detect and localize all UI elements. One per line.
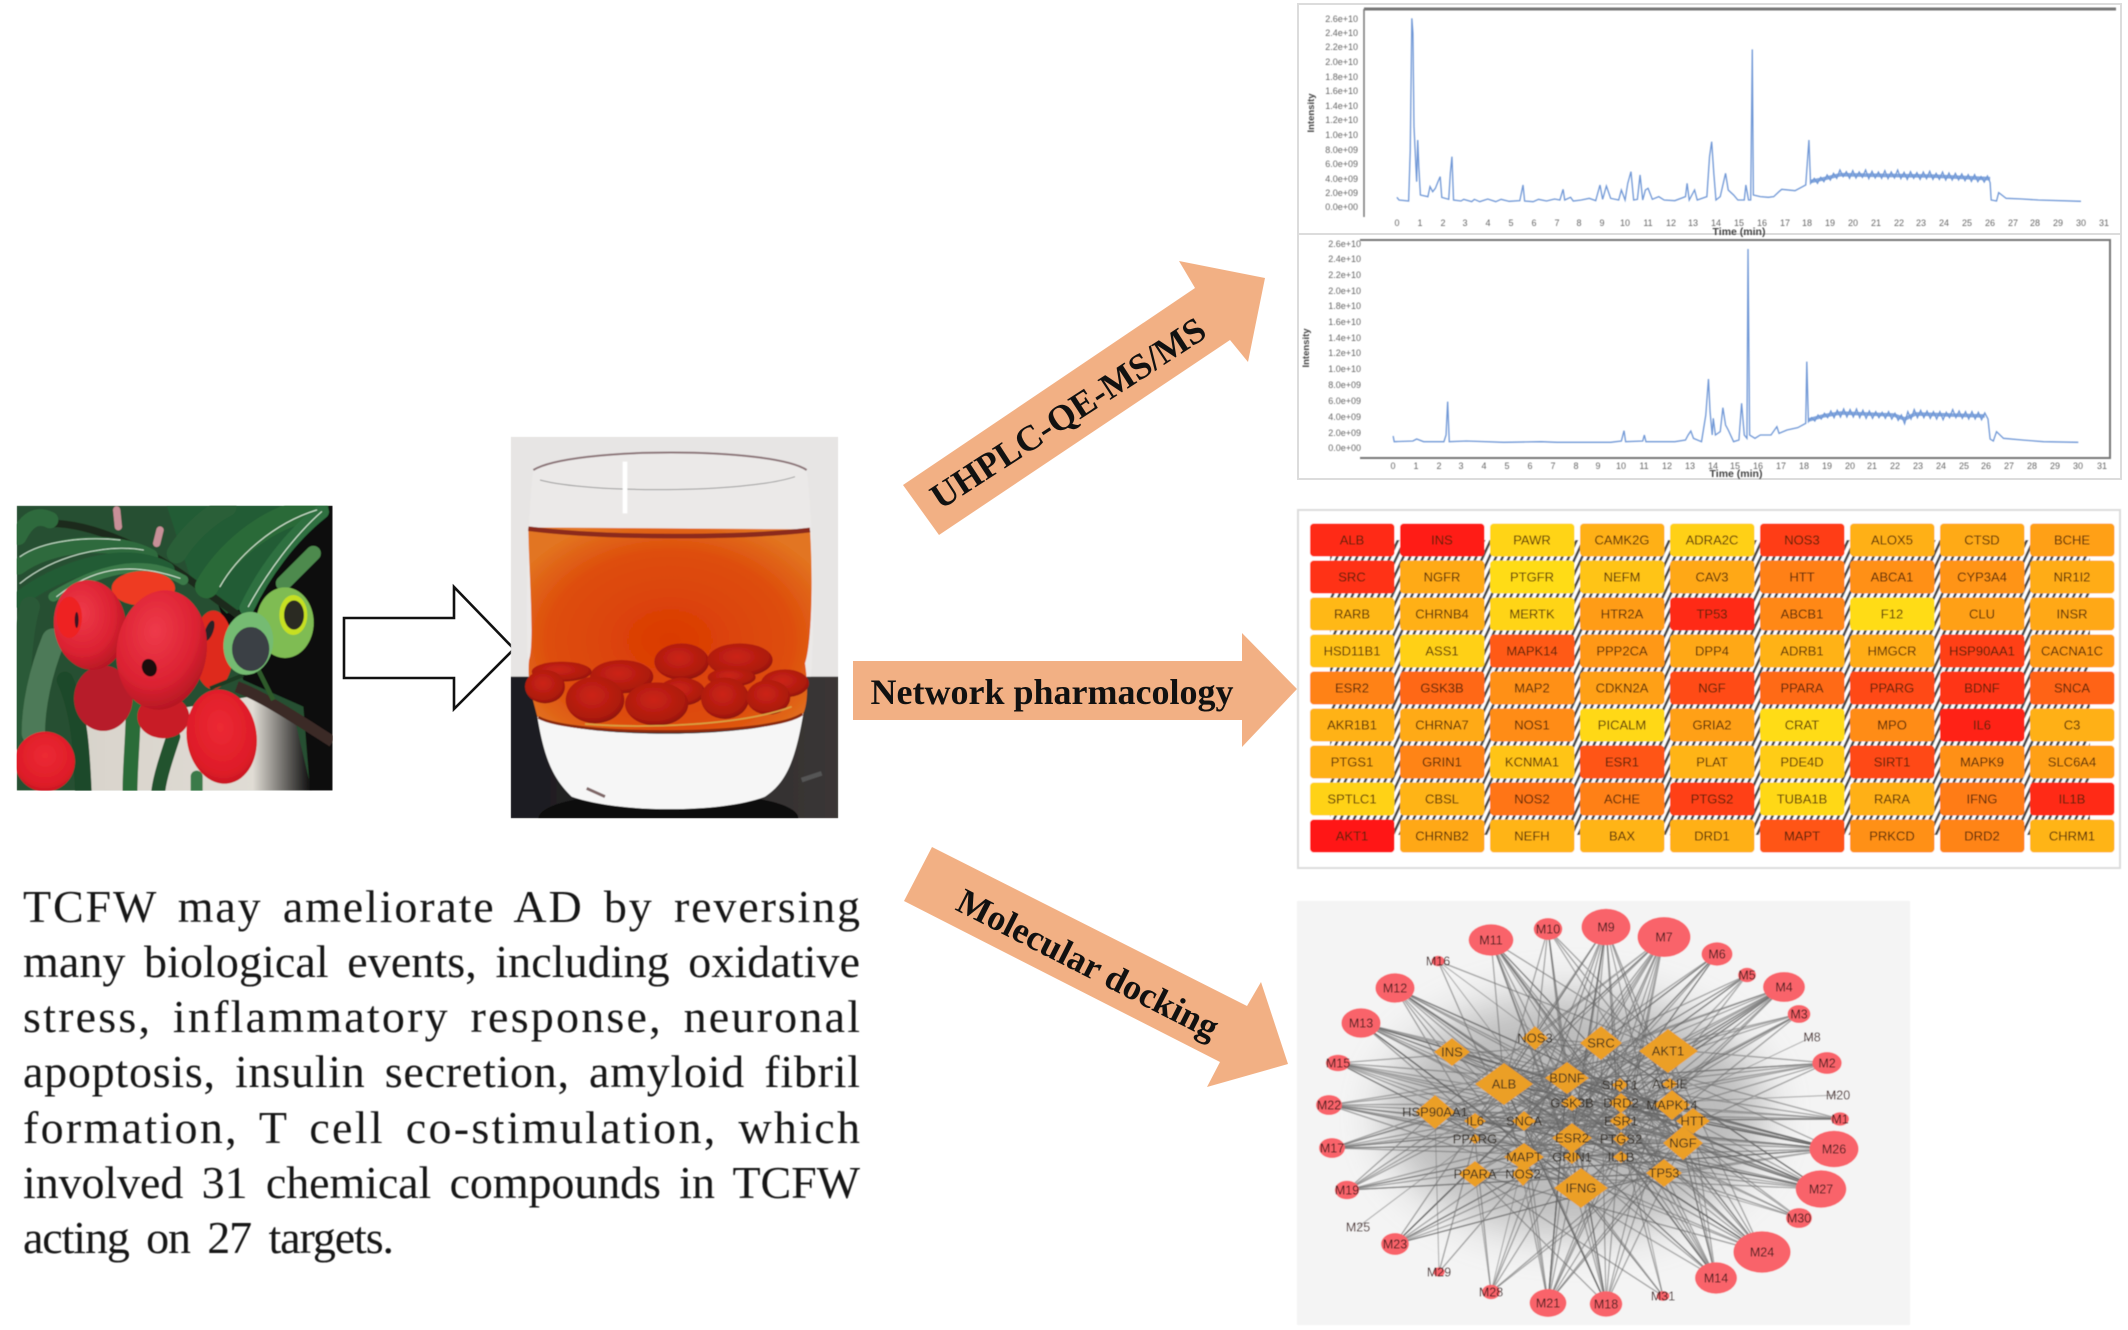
target labels: HSP90AA1 [1402,1104,1468,1120]
row 2: NGFR [1424,570,1460,584]
x axis labels: 26 [1981,461,1991,471]
row 1: ALB [1340,532,1364,548]
target labels: ESR2 [1555,1130,1589,1146]
x axis labels: 28 [2030,218,2040,228]
compound labels: M2 [1818,1056,1836,1070]
compound labels: M12 [1383,982,1407,996]
x axis labels: 24 [1936,461,1946,471]
compound labels: M28 [1479,1286,1503,1300]
row 5 [1310,672,2114,704]
compound labels: M25 [1346,1220,1370,1234]
y axis labels: 8.0e+09 [1328,380,1361,390]
row 5: SNCA [2054,680,2090,696]
y axis labels: 1.0e+10 [1325,130,1358,140]
x axis labels: 6 [1531,218,1537,228]
paragraph: conclusion text: formation, T cell co-stimulation, which [23,1102,860,1153]
target labels: ACHE [1652,1076,1688,1092]
x axis labels: 11 [1639,461,1649,471]
y axis labels: 2.4e+10 [1325,28,1358,38]
y axis labels: 2.4e+10 [1328,254,1361,264]
compound labels: M22 [1317,1098,1341,1112]
y axis labels [1325,14,1358,212]
chart: chromatogram positive mode [1306,9,2116,238]
target labels: SRC [1587,1036,1615,1050]
x axis labels: 30 [2073,461,2083,471]
y axis labels: 0.0e+00 [1325,202,1358,212]
y axis labels: 4.0e+09 [1328,412,1361,422]
compound labels: M20 [1826,1088,1850,1102]
compound labels: M15 [1326,1056,1350,1070]
y axis labels: 2.2e+10 [1328,270,1361,280]
target labels: PPARA [1453,1166,1497,1182]
x axis labels: 21 [1871,218,1881,228]
row 7: PDE4D [1780,754,1824,770]
y axis labels: 6.0e+09 [1328,396,1361,406]
row 8: ACHE [1604,792,1640,806]
target labels: AKT1 [1652,1044,1684,1058]
row 9: CHRM1 [2049,828,2095,844]
row 6: CHRNA7 [1415,718,1469,732]
y axis labels: 0.0e+00 [1328,443,1361,453]
row 6: PICALM [1598,718,1646,732]
row 4: ASS1 [1425,644,1459,658]
paragraph: conclusion text: apoptosis, insulin secretion, amyloid fibril [23,1046,860,1097]
row 3: RARB [1334,606,1370,622]
row 7: KCNMA1 [1505,754,1559,770]
row 4: MAPK14 [1506,644,1558,658]
arrow: Molecular docking: Molecular docking [950,881,1226,1047]
row 3: CHRNB4 [1415,606,1469,622]
target labels: BDNF [1549,1070,1585,1086]
row 9: DRD2 [1964,828,2000,844]
x axis labels: 4 [1485,218,1491,228]
target labels [1402,1030,1706,1196]
y axis title: Intensity [1301,328,1312,368]
y axis labels: 2.0e+10 [1328,286,1361,296]
compound labels: M27 [1809,1182,1833,1196]
y axis labels: 1.8e+10 [1325,72,1358,82]
x axis labels: 30 [2076,218,2086,228]
row 4: CACNA1C [2041,644,2103,658]
y axis labels: 8.0e+09 [1325,145,1358,155]
x axis labels: 17 [1776,461,1786,471]
row 9: CHRNB2 [1415,828,1469,844]
x axis labels: 9 [1595,461,1601,471]
x axis labels [1394,218,2109,228]
row 4: HSD11B1 [1324,644,1380,658]
target labels: TP53 [1648,1166,1680,1180]
y axis title: Intensity [1306,93,1317,133]
row 8: CBSL [1425,792,1459,806]
white outlined arrow from fruit to infusion [344,587,514,709]
compound labels: M23 [1383,1238,1407,1252]
target labels: DRD2 [1603,1096,1639,1110]
compound labels: M11 [1479,934,1503,948]
y axis labels: 2.0e+10 [1325,57,1358,67]
x axis labels: 6 [1527,461,1533,471]
compound labels: M8 [1803,1030,1821,1044]
target labels: ALB [1492,1076,1516,1092]
x axis labels: 14 [1708,461,1718,471]
row 7 [1310,746,2114,778]
y axis labels: 1.8e+10 [1328,301,1361,311]
x axis labels: 7 [1550,461,1556,471]
x axis labels: 20 [1848,218,1858,228]
target labels: MAPK14 [1646,1098,1698,1112]
x axis labels: 18 [1799,461,1809,471]
row 5: BDNF [1964,680,2000,696]
target labels: NOS2 [1505,1166,1541,1182]
row 9: NEFH [1514,828,1550,844]
compound labels: M26 [1822,1142,1846,1156]
row 6 [1310,708,2114,742]
row 9: MAPT [1784,828,1820,844]
row 5: PPARG [1870,680,1914,696]
compound labels: M18 [1594,1298,1618,1312]
row 5: GSK3B [1420,680,1464,696]
x axis labels: 23 [1916,218,1926,228]
row 6: MPO [1877,718,1907,732]
glass photo: yew fruit infusion [511,437,838,818]
row 8: PTGS2 [1691,792,1733,806]
row 7: GRIN1 [1422,754,1462,770]
y axis labels [1328,239,1361,453]
row 9: AKT1 [1336,828,1368,844]
row 1 [1310,524,2114,556]
row 6: CRAT [1785,718,1819,732]
row 3: TP53 [1696,606,1728,622]
panel: compound-target docking network [1297,901,1910,1325]
paragraph: conclusion text: stress, inflammatory response, neuronal [23,991,860,1042]
panel: UHPLC chromatogram frames [1298,4,2121,480]
x axis labels: 7 [1554,218,1560,228]
y axis labels: 1.0e+10 [1328,364,1361,374]
paragraph: conclusion text [23,881,861,1263]
row 3: ABCB1 [1781,606,1823,622]
row 7: SIRT1 [1874,754,1910,770]
row 3: INSR [2056,606,2088,622]
x axis labels: 1 [1413,461,1419,471]
target labels: INS [1441,1044,1463,1060]
arrow: UHPLC-QE-MS/MS: UHPLC-QE-MS/MS [923,309,1213,517]
compound labels: M3 [1790,1008,1808,1022]
row 8: NOS2 [1514,792,1550,806]
target labels: IL1B [1608,1150,1634,1164]
row 6: AKR1B1 [1327,718,1377,732]
y axis labels: 2.6e+10 [1328,239,1361,249]
paragraph: conclusion text: TCFW may ameliorate AD by reversing [23,881,860,932]
x axis labels: 2 [1440,218,1446,228]
row 1: PAWR [1513,532,1551,548]
x axis labels: 14 [1711,218,1721,228]
x axis labels: 10 [1616,461,1626,471]
row 1: CTSD [1964,532,2000,548]
target labels: NOS3 [1517,1030,1553,1046]
compound labels: M10 [1536,922,1560,936]
arrow: Molecular docking [904,847,1288,1087]
y axis labels: 1.2e+10 [1325,115,1358,125]
row 4: DPP4 [1695,644,1729,658]
x axis labels: 28 [2027,461,2037,471]
row 4 [1310,634,2114,668]
berry photo: red yew fruits on branch [15,506,333,792]
x axis labels: 15 [1730,461,1740,471]
row 7: PLAT [1696,754,1728,770]
x axis labels: 27 [2004,461,2014,471]
x axis labels: 16 [1757,218,1767,228]
x axis labels: 31 [2097,461,2107,471]
x axis labels [1390,461,2107,471]
x axis labels: 8 [1576,218,1582,228]
x axis title: Time (min) [1713,226,1765,238]
compound labels: M21 [1536,1296,1560,1310]
x axis labels: 27 [2008,218,2018,228]
y axis labels: 2.0e+09 [1325,188,1358,198]
target labels: SIRT1 [1602,1078,1638,1092]
x axis labels: 18 [1802,218,1812,228]
row 2: NEFM [1604,570,1640,584]
target labels: PPARG [1453,1132,1497,1146]
compound labels: M5 [1738,968,1756,982]
x axis title: Time (min) [1710,468,1762,480]
row 5: PPARA [1780,680,1824,696]
paragraph: conclusion text: involved 31 chemical compounds in TCFW [23,1157,861,1208]
compound labels: M6 [1708,948,1726,962]
row 6: GRIA2 [1692,718,1732,732]
compound labels: M24 [1750,1246,1774,1260]
row 2: CYP3A4 [1957,570,2007,584]
target labels: SNCA [1506,1114,1542,1128]
row 6: C3 [2064,718,2080,732]
x axis labels: 12 [1666,218,1676,228]
row 2: SRC [1338,570,1366,584]
target labels: IL6 [1466,1114,1484,1128]
y axis labels: 2.6e+10 [1325,14,1358,24]
row 4: HSP90AA1 [1949,644,2015,658]
row 1: ALOX5 [1871,532,1913,548]
compound labels: M14 [1704,1272,1728,1286]
row 2: HTT [1789,570,1815,584]
compound labels: M16 [1426,954,1450,968]
arrow: Network pharmacology: Network pharmacology [871,672,1233,712]
x axis labels: 3 [1458,461,1464,471]
row 5: CDKN2A [1596,680,1649,696]
row 9: PRKCD [1869,828,1915,844]
x axis labels: 22 [1890,461,1900,471]
row 3: CLU [1969,606,1995,622]
row 1: ADRA2C [1686,532,1738,548]
compound labels: M17 [1320,1142,1344,1156]
row 7: MAPK9 [1960,754,2004,770]
compound labels [1317,920,1850,1312]
panel: target heat grid [1298,510,2120,868]
row 2: ABCA1 [1871,570,1913,584]
y axis labels: 2.2e+10 [1325,42,1358,52]
row 1: BCHE [2054,532,2090,548]
x axis labels: 10 [1620,218,1630,228]
row 1: INS [1431,532,1453,548]
x axis labels: 9 [1599,218,1605,228]
x axis labels: 19 [1822,461,1832,471]
x axis labels: 13 [1688,218,1698,228]
x axis labels: 3 [1462,218,1468,228]
target labels: HTT [1680,1114,1706,1128]
x axis labels: 29 [2053,218,2063,228]
target labels: MAPT [1506,1150,1542,1164]
row 2 [1310,560,2114,594]
x axis labels: 20 [1845,461,1855,471]
x axis labels: 15 [1734,218,1744,228]
x axis labels: 1 [1417,218,1423,228]
row 2: PTGFR [1510,570,1554,584]
x axis labels: 25 [1959,461,1969,471]
row 8: TUBA1B [1777,792,1827,806]
row 5: MAP2 [1514,680,1550,696]
target nodes [1415,1026,1710,1208]
row 8: IFNG [1966,792,1998,806]
target labels: NGF [1669,1136,1697,1150]
paragraph: conclusion text: acting on 27 targets. [23,1212,394,1263]
row 6: IL6 [1973,718,1991,732]
paragraph: conclusion text: many biological events, including oxidative [23,936,860,987]
row 8: SPTLC1 [1327,792,1377,806]
row 7: ESR1 [1605,754,1639,770]
x axis labels: 31 [2099,218,2109,228]
x axis labels: 21 [1867,461,1877,471]
x axis labels: 23 [1913,461,1923,471]
x axis labels: 29 [2050,461,2060,471]
x axis labels: 16 [1753,461,1763,471]
row 7: PTGS1 [1331,754,1373,770]
compound labels: M31 [1651,1290,1675,1304]
row 3 [1310,598,2114,630]
row 8: IL1B [2059,792,2085,806]
target labels: GRIN1 [1552,1150,1592,1164]
x axis labels: 17 [1780,218,1790,228]
target labels: PTGS2 [1600,1132,1642,1146]
x axis labels: 2 [1436,461,1442,471]
x axis labels: 24 [1939,218,1949,228]
y axis labels: 1.2e+10 [1328,348,1361,358]
x axis labels: 8 [1573,461,1579,471]
row 8 [1310,782,2114,816]
row 1: NOS3 [1784,532,1820,548]
x axis labels: 0 [1394,218,1400,228]
compound labels: M1 [1831,1112,1849,1126]
arrow: UHPLC-QE-MS/MS [903,261,1265,535]
compound labels: M30 [1787,1212,1811,1226]
x axis labels: 11 [1643,218,1653,228]
compound nodes [1316,909,1858,1317]
row 3: HTR2A [1601,606,1644,622]
target labels: ESR1 [1604,1114,1638,1128]
row 3: F12 [1881,606,1903,622]
row 1: CAMK2G [1595,532,1649,548]
y axis labels: 1.6e+10 [1328,317,1361,327]
row 8: RARA [1874,792,1910,806]
row 2: NR1I2 [2054,570,2090,584]
x axis labels: 12 [1662,461,1672,471]
row 9: DRD1 [1694,828,1730,844]
x axis labels: 13 [1685,461,1695,471]
y axis labels: 1.6e+10 [1325,86,1358,96]
row 3: MERTK [1509,606,1555,622]
row 9 [1310,820,2114,852]
row 5: NGF [1698,680,1726,696]
x axis labels: 0 [1390,461,1396,471]
x axis labels: 19 [1825,218,1835,228]
target labels: IFNG [1565,1180,1597,1196]
row 4: HMGCR [1867,644,1917,658]
y axis labels: 1.4e+10 [1328,333,1361,343]
y axis labels: 1.4e+10 [1325,101,1358,111]
x axis labels: 5 [1504,461,1510,471]
compound labels: M29 [1427,1266,1451,1280]
compound labels: M19 [1335,1184,1359,1198]
x axis labels: 4 [1481,461,1487,471]
arrow: Network pharmacology [853,633,1297,747]
x axis labels: 25 [1962,218,1972,228]
chart: chromatogram negative mode [1301,239,2110,480]
compound labels: M13 [1349,1016,1373,1030]
row 4: ADRB1 [1780,644,1824,658]
row 6: NOS1 [1514,718,1550,732]
row 7: SLC6A4 [2048,754,2096,770]
compound labels: M7 [1655,930,1673,944]
row 2: CAV3 [1696,570,1728,584]
target labels: GSK3B [1550,1096,1594,1110]
x axis labels: 26 [1985,218,1995,228]
y axis labels: 2.0e+09 [1328,428,1361,438]
x axis labels: 22 [1894,218,1904,228]
row 5: ESR2 [1335,680,1369,696]
compound labels: M9 [1597,920,1615,934]
compound labels: M4 [1775,980,1793,994]
y axis labels: 4.0e+09 [1325,174,1358,184]
x axis labels: 5 [1508,218,1514,228]
row 4: PPP2CA [1596,644,1648,658]
y axis labels: 6.0e+09 [1325,159,1358,169]
row 9: BAX [1609,828,1635,844]
